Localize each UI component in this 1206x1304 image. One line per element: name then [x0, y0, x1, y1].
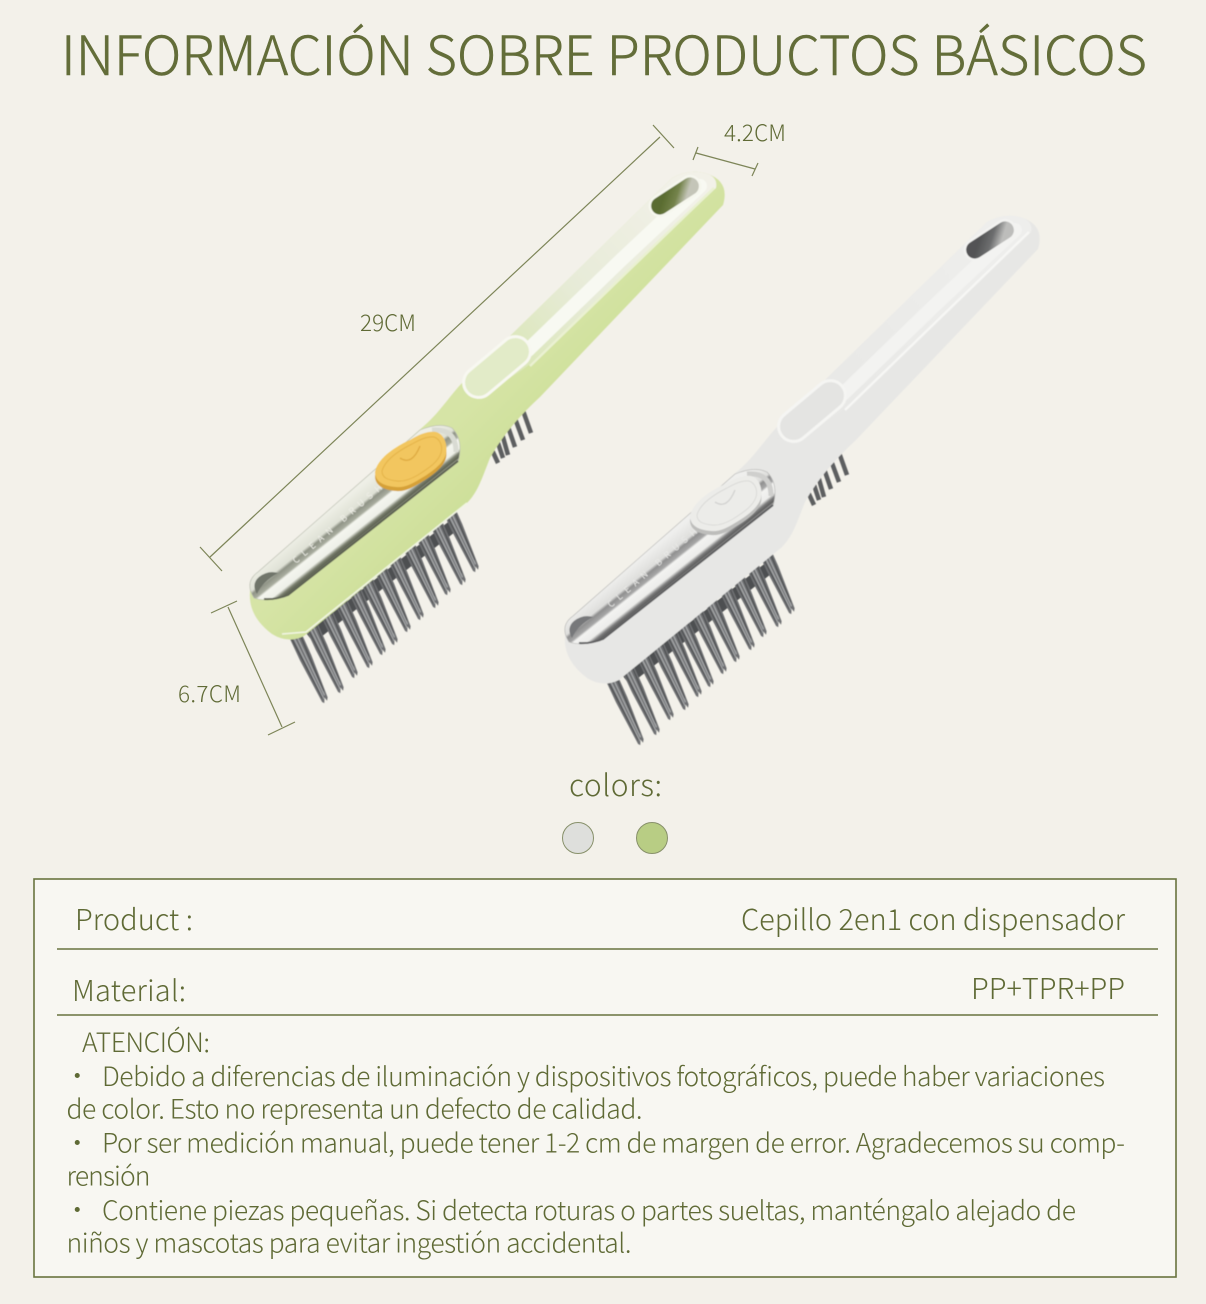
green brush	[250, 172, 725, 705]
hanging hole	[646, 172, 704, 220]
gray brush	[565, 216, 1040, 747]
material row	[72, 966, 1125, 1010]
dimension: 6.7CM: 6.7CM	[178, 677, 241, 709]
attention notes	[64, 1021, 1125, 1260]
attention notes: Por ser medición manual, puede tener 1-2 cm de margen de error. Agradecemos su comp-	[102, 1122, 1125, 1160]
dimension: 4.2CM: 4.2CM	[724, 116, 786, 148]
attention notes: ・	[64, 1055, 90, 1094]
panel: product information	[34, 879, 1176, 1277]
material row: Material:	[72, 968, 186, 1010]
dimension: 4.2CM	[693, 116, 786, 176]
attention notes: ・	[64, 1122, 90, 1161]
attention notes: niños y mascotas para evitar ingestión accidental.	[66, 1222, 632, 1260]
attention notes: ATENCIÓN:	[82, 1021, 210, 1060]
swatch: gray	[562, 822, 594, 854]
handle highlight stripe	[528, 186, 700, 350]
dimension: 29CM: 29CM	[360, 306, 416, 338]
printed label on window: CLEAN BRUSH	[289, 481, 385, 566]
colors label: colors:	[569, 761, 662, 805]
product row	[75, 897, 1126, 939]
dimension: 29CM	[200, 125, 674, 571]
soap window	[250, 425, 460, 600]
attention notes: ・	[64, 1189, 90, 1228]
product row: Product :	[75, 897, 193, 939]
dimension: 6.7CM	[178, 601, 295, 735]
gray button	[690, 476, 762, 535]
attention notes: Contiene piezas pequeñas. Si detecta roturas o partes sueltas, manténgalo alejado de	[102, 1189, 1076, 1228]
upper handle shade	[462, 172, 716, 396]
green brush body	[250, 172, 725, 640]
material row: PP+TPR+PP	[971, 966, 1125, 1008]
attention notes: de color. Esto no representa un defecto de calidad.	[66, 1088, 642, 1126]
title: INFORMACIÓN SOBRE PRODUCTOS BÁSICOS	[61, 12, 1147, 91]
gray printed label: CLEAN BRUSH	[604, 525, 700, 610]
head lower highlight	[282, 503, 467, 634]
attention notes: rensión	[66, 1154, 150, 1194]
swatch: green	[636, 822, 668, 854]
yellow button	[375, 432, 447, 491]
product row: Cepillo 2en1 con dispensador	[741, 897, 1126, 939]
oval pill	[457, 330, 537, 404]
attention notes: Debido a diferencias de iluminación y dispositivos fotográficos, puede haber variaciones	[102, 1055, 1105, 1094]
gray brush body	[565, 216, 1040, 684]
